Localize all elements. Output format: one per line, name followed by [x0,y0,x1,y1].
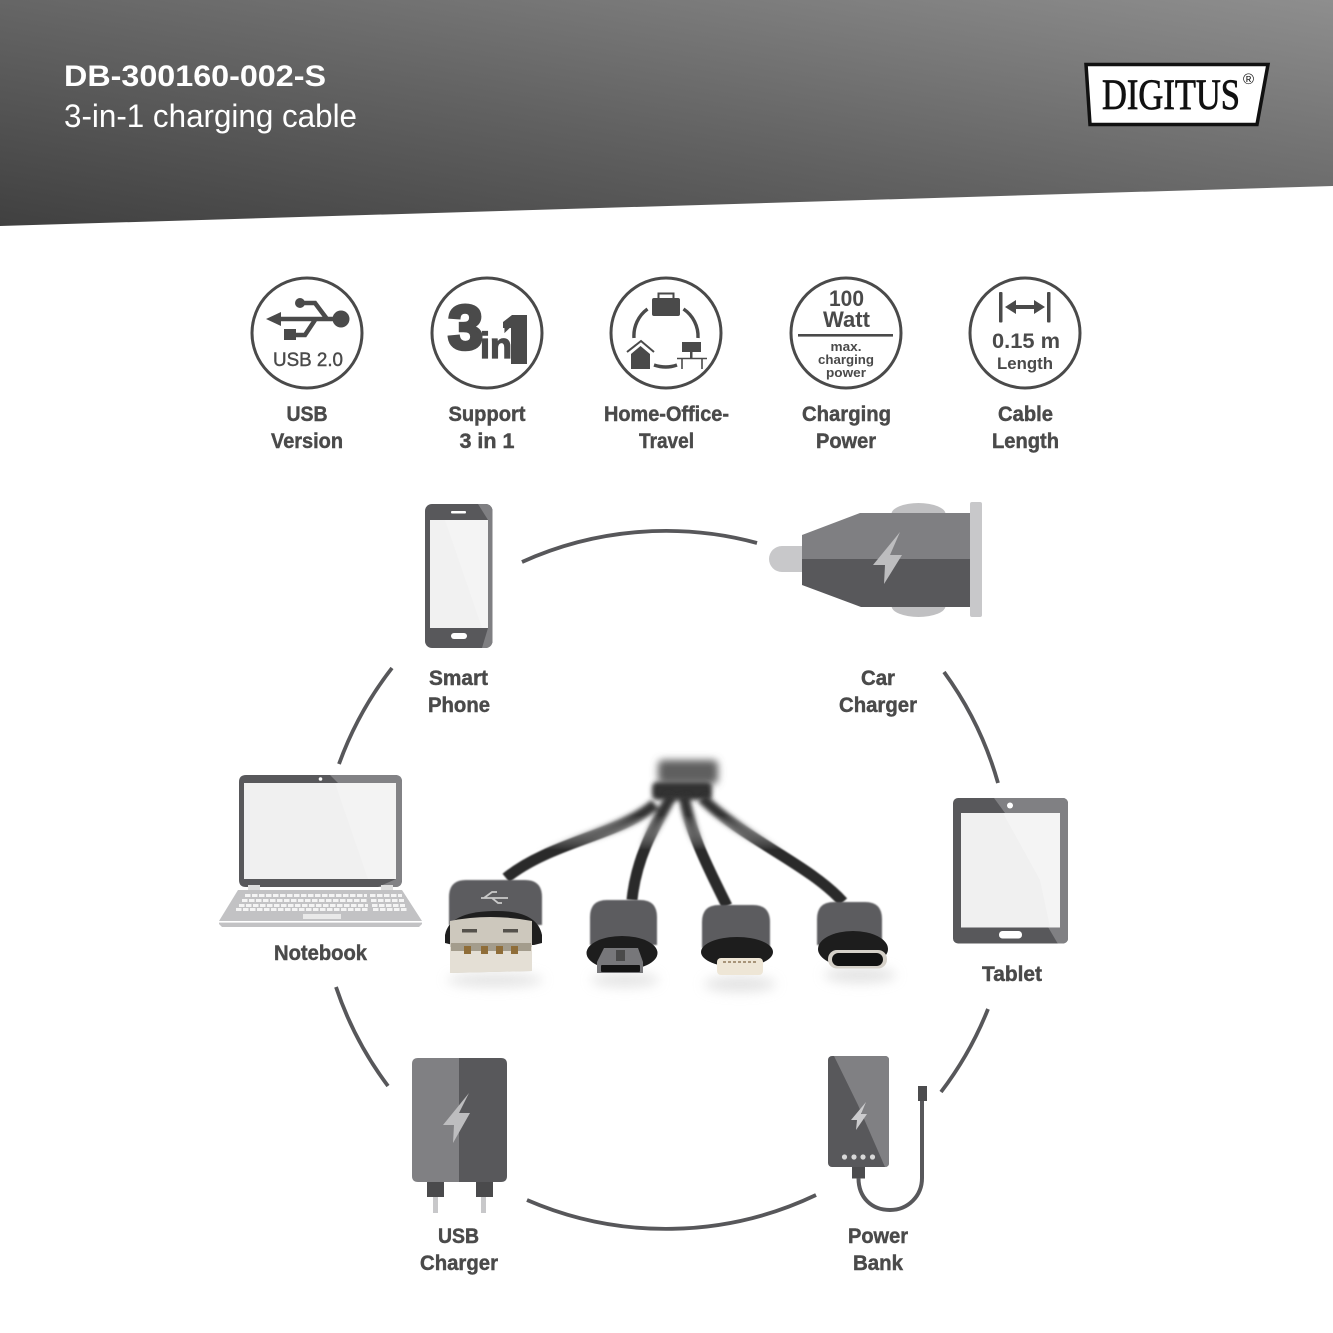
icon: 3 in 1: in [480,325,512,366]
Lightning plug [701,905,773,975]
label: Car Charger: Charger [839,694,917,717]
icon: USB 2.0: USB 2.0 [273,350,343,371]
icon: USB 2.0 [252,278,362,388]
label: USB Version: USB [286,403,328,426]
label: Power Bank: Bank [853,1252,903,1275]
product photo: 3-in-1 cable [445,760,896,992]
label: Cable Length: Length [992,430,1059,453]
icon: 3 in 1: 3 [448,294,483,363]
label: USB Charger: Charger [420,1252,498,1275]
logo: DIGITUS: DIGITUS [1102,72,1240,119]
label: Cable Length [992,403,1059,453]
label: Home-Office-Travel: Travel [639,430,694,453]
label: USB Version: Version [271,430,343,453]
label: Support 3 in 1: Support [448,403,526,426]
title: product number and name: DB-300160-002-S [64,60,326,93]
label: Support 3 in 1: 3 in 1 [460,430,515,453]
icon: home office travel [611,278,721,388]
logo: DIGITUS [1086,64,1268,124]
label: USB Version [271,403,343,453]
label: Charging Power: Charging [802,403,891,426]
label: Charging Power: Power [816,430,876,453]
icon: cable length 0.15 m [970,278,1080,388]
icon: 3 in 1: 1 [502,301,527,379]
soft shadows [447,967,896,992]
label: Car Charger [839,667,917,717]
cable splitter head [658,760,718,784]
label: Home-Office-Travel [604,403,729,453]
USB-A plug [445,880,542,973]
label: Smart Phone: Phone [428,694,490,717]
feature icon row [252,278,1080,453]
label: USB Charger [420,1225,498,1275]
label: Cable Length: Cable [998,403,1053,426]
label: Support 3 in 1 [448,403,526,453]
header banner [0,0,1333,226]
label: Power Bank [848,1225,908,1275]
label: Notebook: Notebook [274,942,367,965]
label: Charging Power [802,403,891,453]
icon: smart phone [425,504,493,648]
icon: 100 Watt charging power: charging [818,352,874,367]
blurred upper cable strands [549,794,778,846]
title: product number and name [64,60,357,134]
label: Power Bank: Power [848,1225,908,1248]
icon: 100 Watt charging power: max. [830,339,862,354]
title: product number and name: 3-in-1 charging cable [64,98,357,134]
icon: 100 Watt charging power: Watt [823,307,871,332]
connecting ring arcs [336,531,998,1229]
label: Tablet: Tablet [982,963,1042,986]
label: Car Charger: Car [861,667,895,690]
icon: tablet [953,798,1068,944]
icon: notebook laptop [219,775,422,927]
logo: DIGITUS: ® [1243,71,1254,88]
sharp lower cable strands [502,818,848,906]
icon: cable length 0.15 m: 0.15 m [992,330,1060,353]
icon: USB charger [412,1058,507,1213]
icon: 3 in 1 [432,278,542,388]
icon: 100 Watt charging power [791,278,901,388]
label: Smart Phone: Smart [429,667,488,690]
label: USB Charger: USB [438,1225,479,1248]
label: Home-Office-Travel: Home-Office- [604,403,729,426]
icon: 100 Watt charging power: 100 [829,286,864,311]
label: Smart Phone [428,667,490,717]
icon: power bank with cable [828,1056,927,1210]
icon: 100 Watt charging power: power [826,365,866,380]
USB symbol on plug [481,892,508,903]
USB-C plug [817,902,888,968]
Micro-USB plug [586,900,658,973]
icon: cable length 0.15 m: Length [997,354,1053,373]
icon: car charger [769,502,982,617]
